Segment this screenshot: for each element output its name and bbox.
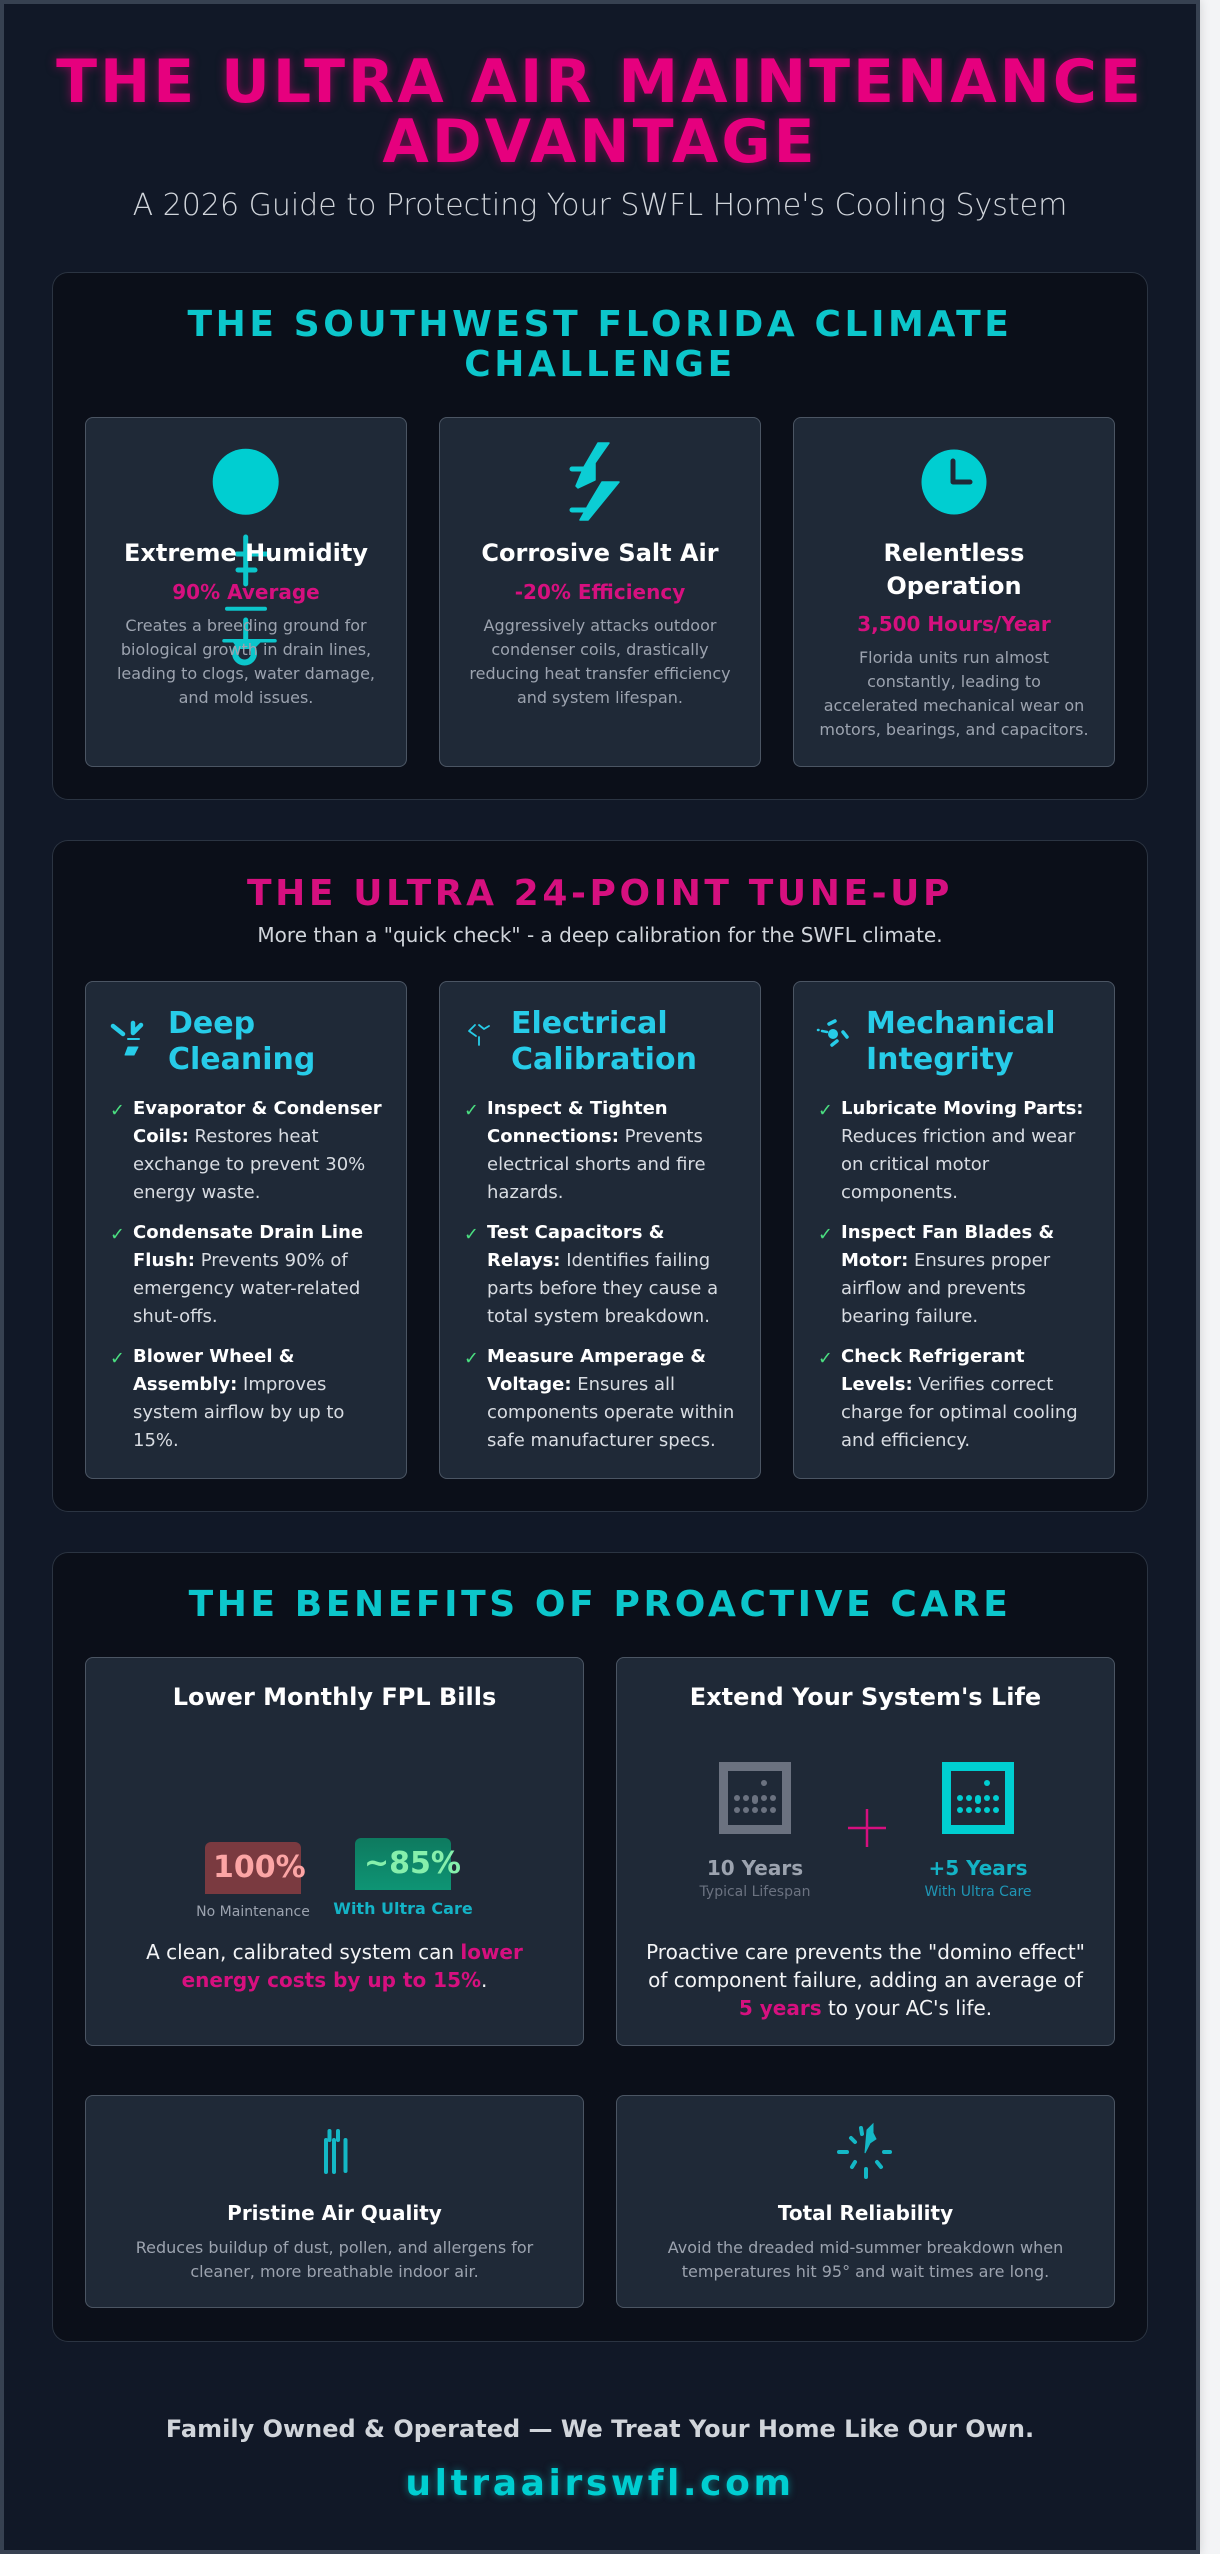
checklist item: Reduces friction and wear: [841, 1126, 1075, 1147]
icon: cleaning: [110, 1020, 144, 1056]
checklist item: Inspect & Tighten: [487, 1098, 668, 1118]
card description: motors, bearings, and capacitors.: [819, 720, 1089, 739]
card: extend life: [616, 1657, 1115, 2046]
bar label: No Maintenance: [196, 1904, 310, 1920]
card: deep cleaning: ✓: [110, 1100, 125, 1120]
card: electrical calibration: ✓: [464, 1100, 479, 1120]
checklist item: Flush: Prevents 90% of: [133, 1250, 348, 1271]
card description: Aggressively attacks outdoor: [484, 616, 716, 635]
card heading: Mechanical: [866, 1006, 1056, 1041]
card description: [819, 648, 1089, 739]
card heading: Integrity: [866, 1042, 1014, 1077]
card title: Lower Monthly FPL Bills: [173, 1683, 496, 1711]
card title: Corrosive Salt Air: [481, 539, 719, 567]
checklist item: [464, 1346, 734, 1451]
checklist item: airflow and prevents: [841, 1278, 1026, 1299]
panel: benefits: [52, 1552, 1148, 2342]
icon: unit 10 years: [719, 1762, 791, 1834]
title: [51, 47, 1144, 177]
icon: mechanical: [816, 1019, 849, 1047]
icon: reliability: [837, 2122, 892, 2179]
title: THE ULTRA AIR MAINTENANCE: [56, 47, 1144, 117]
checklist item: [464, 1222, 718, 1327]
card: mechanical integrity: ✓: [818, 1100, 833, 1120]
checklist item: components.: [841, 1182, 958, 1203]
card description: biological growth in drain lines,: [121, 640, 371, 659]
card title: Relentless: [884, 539, 1024, 567]
card description: Reduces buildup of dust, pollen, and allergens for: [136, 2238, 533, 2257]
icon: plus: [848, 1809, 886, 1847]
card title: Operation: [886, 572, 1022, 600]
card: corrosive salt air: [439, 417, 761, 767]
checklist item: [110, 1098, 382, 1203]
card: electrical calibration: ✓: [464, 1224, 479, 1244]
card description: cleaner, more breathable indoor air.: [190, 2262, 479, 2281]
checklist item: total system breakdown.: [487, 1306, 710, 1327]
heading: climate challenge: THE SOUTHWEST FLORIDA CLIMATE: [187, 304, 1012, 345]
checklist item: Blower Wheel &: [133, 1346, 294, 1366]
panel: 24-point tune-up: [52, 840, 1148, 1512]
checklist item: on critical motor: [841, 1154, 989, 1175]
card: total reliability: [616, 2095, 1115, 2308]
card heading: Calibration: [511, 1042, 697, 1077]
card heading: [866, 1006, 1056, 1077]
card: mechanical integrity: ✓: [818, 1348, 833, 1368]
card: mechanical integrity: ✓: [818, 1224, 833, 1244]
checklist item: emergency water-related: [133, 1278, 360, 1299]
checklist item: charge for optimal cooling: [841, 1402, 1078, 1423]
card heading: [511, 1006, 697, 1077]
checklist item: Measure Amperage &: [487, 1346, 706, 1366]
card description: leading to clogs, water damage,: [117, 664, 375, 683]
card: relentless operation: [793, 417, 1115, 767]
card heading: Deep: [168, 1006, 255, 1041]
card description: Avoid the dreaded mid-summer breakdown when: [668, 2238, 1063, 2257]
checklist item: [110, 1346, 344, 1451]
bar value: 100%: [213, 1850, 306, 1885]
stat: 90% Average: [172, 580, 320, 604]
card description: temperatures hit 95° and wait times are long.: [682, 2262, 1049, 2281]
text: typical lifespan: Typical Lifespan: [700, 1884, 810, 1900]
checklist item: shut-offs.: [133, 1306, 218, 1327]
icon: clock: [922, 450, 986, 514]
icon: humidity: [212, 448, 279, 666]
card description: Creates a breeding ground for: [125, 616, 367, 635]
checklist item: and efficiency.: [841, 1430, 970, 1451]
checklist item: [464, 1098, 706, 1203]
checklist item: Evaporator & Condenser: [133, 1098, 382, 1118]
panel: climate challenge: [52, 272, 1148, 800]
text: with ultra care: With Ultra Care: [924, 1884, 1032, 1900]
card description: and system lifespan.: [517, 688, 683, 707]
card title: Extend Your System's Life: [690, 1683, 1041, 1711]
card description: [117, 616, 375, 707]
card: deep cleaning: [85, 981, 407, 1479]
card heading: Cleaning: [168, 1042, 315, 1077]
card: mechanical integrity: [793, 981, 1115, 1479]
bar: with ultra care: [355, 1838, 451, 1890]
tune-up subtitle: More than a "quick check" - a deep calibration for the SWFL climate.: [257, 923, 943, 947]
checklist item: Check Refrigerant: [841, 1346, 1025, 1366]
stat: -20% Efficiency: [515, 580, 685, 604]
heading: benefits: THE BENEFITS OF PROACTIVE CARE: [189, 1584, 1011, 1625]
text: 10 years: 10 Years: [707, 1856, 803, 1880]
icon: salt air bolts: [570, 442, 620, 521]
benefit text: 5 years to your AC's life.: [739, 1996, 992, 2020]
checklist item: Levels: Verifies correct: [841, 1374, 1053, 1395]
checklist item: Voltage: Ensures all: [487, 1374, 675, 1395]
stat: 3,500 Hours/Year: [857, 612, 1051, 636]
heading: climate challenge: [187, 304, 1012, 385]
card: deep cleaning: ✓: [110, 1224, 125, 1244]
benefit text: A clean, calibrated system can lower: [146, 1940, 523, 1964]
title: ADVANTAGE: [382, 107, 818, 177]
card heading: Electrical: [511, 1006, 668, 1041]
card description: [136, 2238, 534, 2281]
card title: [884, 539, 1024, 600]
checklist item: [110, 1222, 363, 1327]
checklist item: [818, 1346, 1078, 1451]
checklist item: Relays: Identifies failing: [487, 1250, 710, 1271]
checklist item: system airflow by up to: [133, 1402, 344, 1423]
checklist item: safe manufacturer specs.: [487, 1430, 716, 1451]
checklist item: 15%.: [133, 1430, 179, 1451]
card description: [469, 616, 731, 707]
card description: and mold issues.: [179, 688, 313, 707]
card description: [668, 2238, 1063, 2281]
card: electrical calibration: ✓: [464, 1348, 479, 1368]
checklist item: Motor: Ensures proper: [841, 1250, 1050, 1271]
checklist item: Coils: Restores heat: [133, 1126, 319, 1147]
heading: climate challenge: CHALLENGE: [464, 344, 736, 385]
benefit text: of component failure, adding an average of: [648, 1968, 1083, 1992]
benefit text: [646, 1940, 1085, 2020]
card title: Extreme Humidity: [124, 539, 368, 567]
subtitle: A 2026 Guide to Protecting Your SWFL Home's Cooling System: [133, 188, 1067, 223]
card: extreme humidity: [85, 417, 407, 767]
checklist item: Lubricate Moving Parts:: [841, 1098, 1084, 1118]
card description: Florida units run almost: [859, 648, 1049, 667]
bar value: ~85%: [364, 1846, 461, 1881]
card description: condenser coils, drastically: [491, 640, 709, 659]
bar label: With Ultra Care: [333, 1899, 473, 1918]
card: lower bills: [85, 1657, 584, 2046]
checklist item: energy waste.: [133, 1182, 260, 1203]
checklist item: [818, 1222, 1054, 1327]
benefit text: [146, 1940, 523, 1992]
checklist item: Connections: Prevents: [487, 1126, 703, 1147]
bar: no maintenance: [205, 1842, 301, 1894]
benefit text: Proactive care prevents the "domino effect": [646, 1940, 1085, 1964]
icon: air quality: [324, 2129, 348, 2174]
icon: unit plus 5 years: [942, 1762, 1014, 1834]
checklist item: electrical shorts and fire: [487, 1154, 706, 1175]
benefit text: energy costs by up to 15%.: [182, 1968, 487, 1992]
checklist item: bearing failure.: [841, 1306, 978, 1327]
checklist item: components operate within: [487, 1402, 734, 1423]
card heading: [168, 1006, 315, 1077]
card title: Total Reliability: [778, 2201, 953, 2225]
checklist item: Inspect Fan Blades &: [841, 1222, 1054, 1242]
card: air quality: [85, 2095, 584, 2308]
card: deep cleaning: ✓: [110, 1348, 125, 1368]
footer website: ultraairswfl.com: [405, 2463, 795, 2504]
card description: reducing heat transfer efficiency: [469, 664, 731, 683]
checklist item: hazards.: [487, 1182, 564, 1203]
footer tagline: Family Owned & Operated — We Treat Your Home Like Our Own.: [166, 2415, 1034, 2443]
card description: constantly, leading to: [867, 672, 1041, 691]
card description: accelerated mechanical wear on: [824, 696, 1084, 715]
icon: electrical: [468, 1024, 490, 1046]
card: electrical calibration: [439, 981, 761, 1479]
checklist item: [818, 1098, 1084, 1203]
checklist item: Test Capacitors &: [487, 1222, 664, 1242]
checklist item: exchange to prevent 30%: [133, 1154, 365, 1175]
checklist item: Assembly: Improves: [133, 1374, 326, 1395]
checklist item: parts before they cause a: [487, 1278, 718, 1299]
text: plus 5 years: +5 Years: [928, 1856, 1028, 1880]
card title: Pristine Air Quality: [227, 2201, 442, 2225]
checklist item: Condensate Drain Line: [133, 1222, 363, 1242]
heading: tune-up: THE ULTRA 24-POINT TUNE-UP: [247, 873, 953, 914]
